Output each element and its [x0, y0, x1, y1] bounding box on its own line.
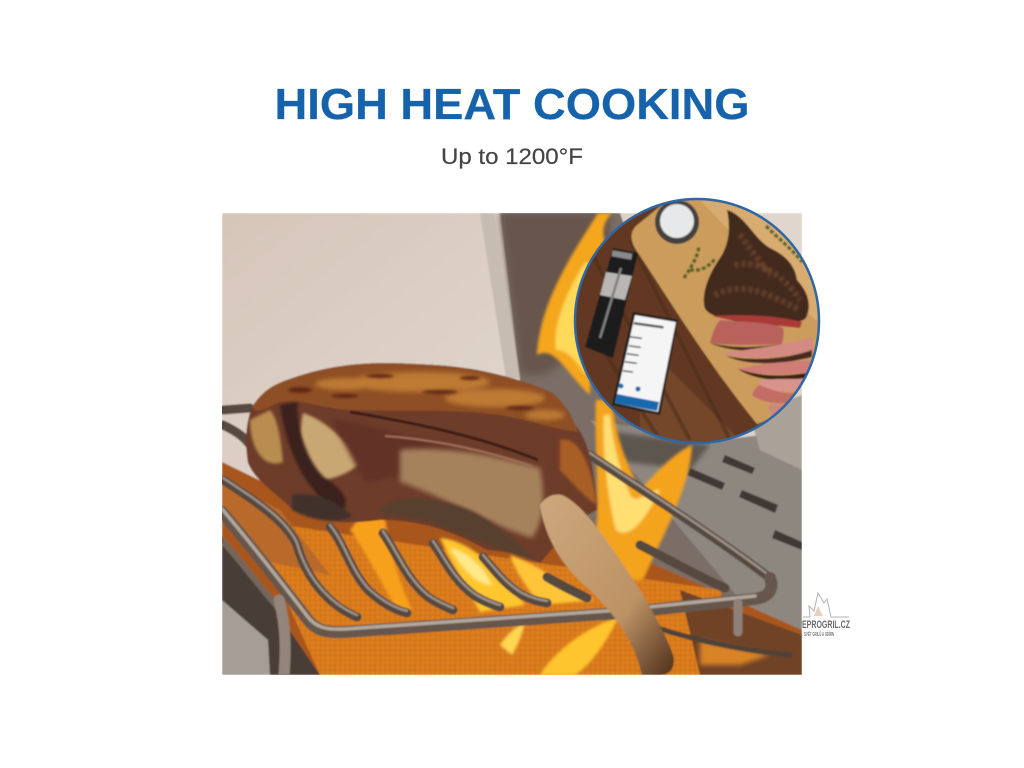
steak on board: [704, 210, 814, 417]
watermark logo: EPROGRIL.CZ: [802, 619, 850, 631]
title: HIGH HEAT COOKING: [274, 80, 750, 129]
grill grate rods: [222, 408, 790, 675]
watermark logo: [802, 593, 850, 638]
grill back wall: [222, 213, 802, 482]
photo: steak on grill over flames: [222, 213, 802, 675]
front rail: [222, 512, 771, 632]
cutting board: [632, 190, 830, 424]
firebox and mesh burner: [222, 462, 802, 675]
wood table: [584, 206, 764, 442]
steak body: [246, 363, 597, 563]
bone: [540, 495, 674, 675]
salt bowl: [655, 200, 699, 244]
thermometer charger: [585, 248, 638, 358]
watermark logo: SVĚT GRILŮ A UDÍRN: [804, 630, 834, 638]
seared crust: [252, 363, 578, 432]
flames: [350, 213, 692, 675]
fat and meat layers: [300, 413, 362, 480]
inset circle: thermometer, app and sliced steak: [570, 190, 830, 445]
steak: [246, 363, 597, 563]
hood, side shelf and firebox background: [480, 213, 802, 640]
phone with app: [612, 312, 678, 415]
herbs: [684, 226, 802, 278]
subtitle: Up to 1200°F: [441, 144, 583, 169]
